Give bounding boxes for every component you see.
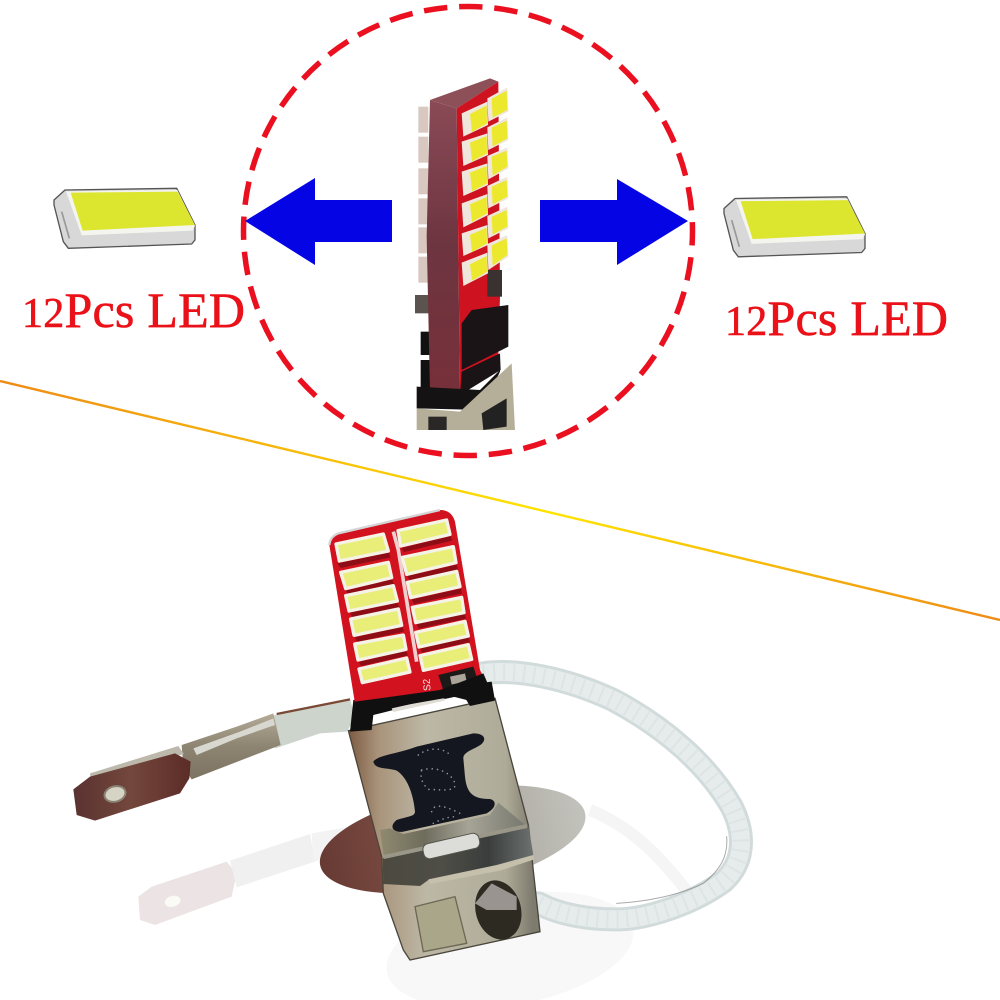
board outline xyxy=(329,510,488,703)
silver clip xyxy=(422,832,481,860)
right label: 12Pcs LED xyxy=(725,290,948,346)
close-up LED board xyxy=(415,78,515,430)
board front face xyxy=(457,82,500,392)
left label: 12Pcs LED xyxy=(22,282,245,338)
black base and metal socket xyxy=(417,363,515,430)
reflective band under the slot xyxy=(380,803,527,858)
bulb metal socket xyxy=(311,682,594,960)
centre strip xyxy=(393,532,417,662)
faint reflection of the bulb xyxy=(138,810,690,1000)
front LED circuit board xyxy=(329,510,493,713)
blade hole xyxy=(103,784,127,804)
right LED chip icon xyxy=(724,197,865,257)
electronic components xyxy=(460,270,508,395)
blade face xyxy=(73,753,191,821)
reflected socket xyxy=(377,874,643,1000)
lead insulation xyxy=(270,698,355,748)
top pale edge xyxy=(329,510,440,545)
main body xyxy=(348,698,540,960)
small resistor component xyxy=(438,667,478,690)
lower edge xyxy=(428,855,534,884)
right column LEDs xyxy=(398,520,472,670)
left column LEDs xyxy=(462,102,488,286)
flange disc xyxy=(311,766,594,913)
blade top edge xyxy=(90,746,184,778)
divider line xyxy=(0,381,1000,620)
LED shadows xyxy=(337,536,470,666)
rear LED tabs xyxy=(418,107,428,283)
top silver strip xyxy=(392,697,445,712)
small board marking: S2 xyxy=(422,678,434,691)
left LED chip icon xyxy=(54,188,195,248)
black board holder xyxy=(350,682,495,732)
left column LEDs xyxy=(336,534,410,683)
round window xyxy=(469,875,528,945)
slot dot pattern xyxy=(418,749,460,823)
collar band xyxy=(383,826,533,886)
board top edge xyxy=(430,78,498,108)
I-shaped slot xyxy=(373,733,495,832)
crimp xyxy=(182,713,281,779)
black holder top xyxy=(355,673,493,713)
dashed red circle xyxy=(244,6,692,456)
right blue arrow xyxy=(540,179,688,265)
braided white wire xyxy=(483,672,741,919)
reflected wire xyxy=(590,810,690,895)
right column LEDs xyxy=(487,87,508,270)
black components on the left xyxy=(415,295,434,390)
terminal and insulated lead xyxy=(73,698,355,821)
reflected terminal xyxy=(138,825,360,925)
left blue arrow xyxy=(245,178,392,265)
recessed window xyxy=(415,897,467,952)
board side face xyxy=(427,100,460,392)
